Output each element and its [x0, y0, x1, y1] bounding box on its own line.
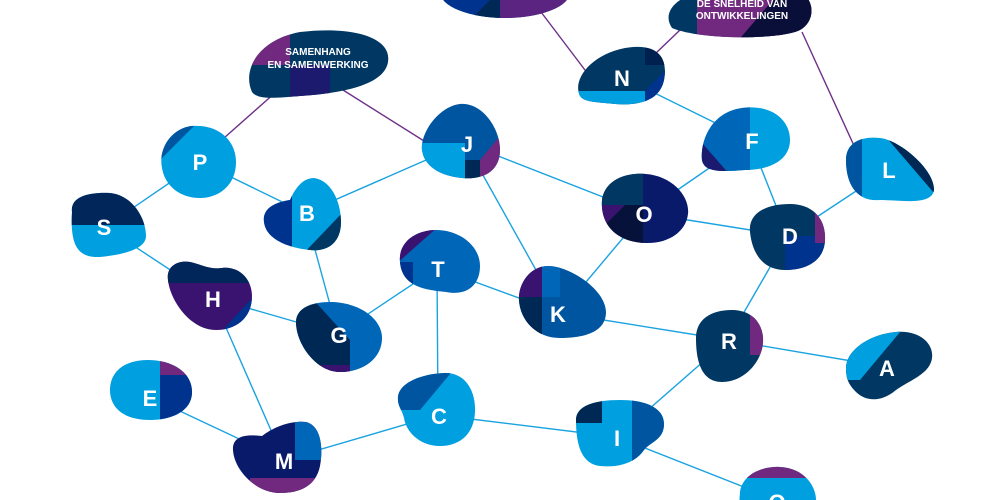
node: O: [602, 174, 688, 243]
node: L: L: [882, 158, 896, 183]
node: N: N: [614, 66, 630, 91]
node: DE SNELHEID VAN ONTWIKKELINGEN: ONTWIKKELINGEN: [696, 11, 788, 22]
node: N: [578, 46, 665, 104]
node: G: G: [330, 323, 348, 348]
node: I: [576, 400, 664, 466]
node: D: D: [782, 224, 798, 249]
node: C: C: [431, 404, 447, 429]
node: O: O: [635, 202, 653, 227]
node: A: A: [879, 356, 895, 381]
node: D: [750, 204, 826, 270]
node: H: [168, 262, 252, 330]
node: T: [400, 230, 480, 293]
node: Q partial: [739, 466, 816, 500]
node: P: P: [193, 150, 207, 175]
node: DE SNELHEID VAN ONTWIKKELINGEN: [668, 0, 812, 38]
node: SAMENHANG EN SAMENWERKING: EN SAMENWERKING: [267, 60, 369, 71]
node: B: B: [299, 201, 315, 226]
node: K: [518, 266, 606, 338]
node: E: [110, 360, 192, 420]
node: F: F: [745, 129, 759, 154]
node: J: J: [461, 132, 473, 157]
node: R: R: [721, 329, 737, 354]
node: SAMENHANG EN SAMENWERKING: [249, 30, 388, 98]
node: H: H: [205, 287, 221, 312]
node: L: [846, 138, 934, 202]
node: top partial blob: [443, 0, 567, 18]
node: P: [161, 126, 236, 198]
node: A: [846, 332, 932, 400]
node: J: [422, 104, 500, 178]
node: F: [702, 107, 790, 171]
node: T: T: [431, 257, 445, 282]
node: M: [232, 422, 322, 493]
node: C: [398, 373, 476, 446]
node: K: K: [550, 302, 566, 327]
node: R: [696, 310, 764, 382]
node: B: [264, 178, 341, 250]
node: SAMENHANG EN SAMENWERKING: SAMENHANG: [285, 47, 351, 58]
node: I: I: [614, 426, 620, 451]
node: G: [296, 302, 382, 372]
connector lines: [105, 12, 888, 500]
node: E: E: [143, 386, 157, 411]
node: S: S: [97, 215, 111, 240]
node: S: [72, 192, 146, 257]
node: M: M: [275, 449, 293, 474]
